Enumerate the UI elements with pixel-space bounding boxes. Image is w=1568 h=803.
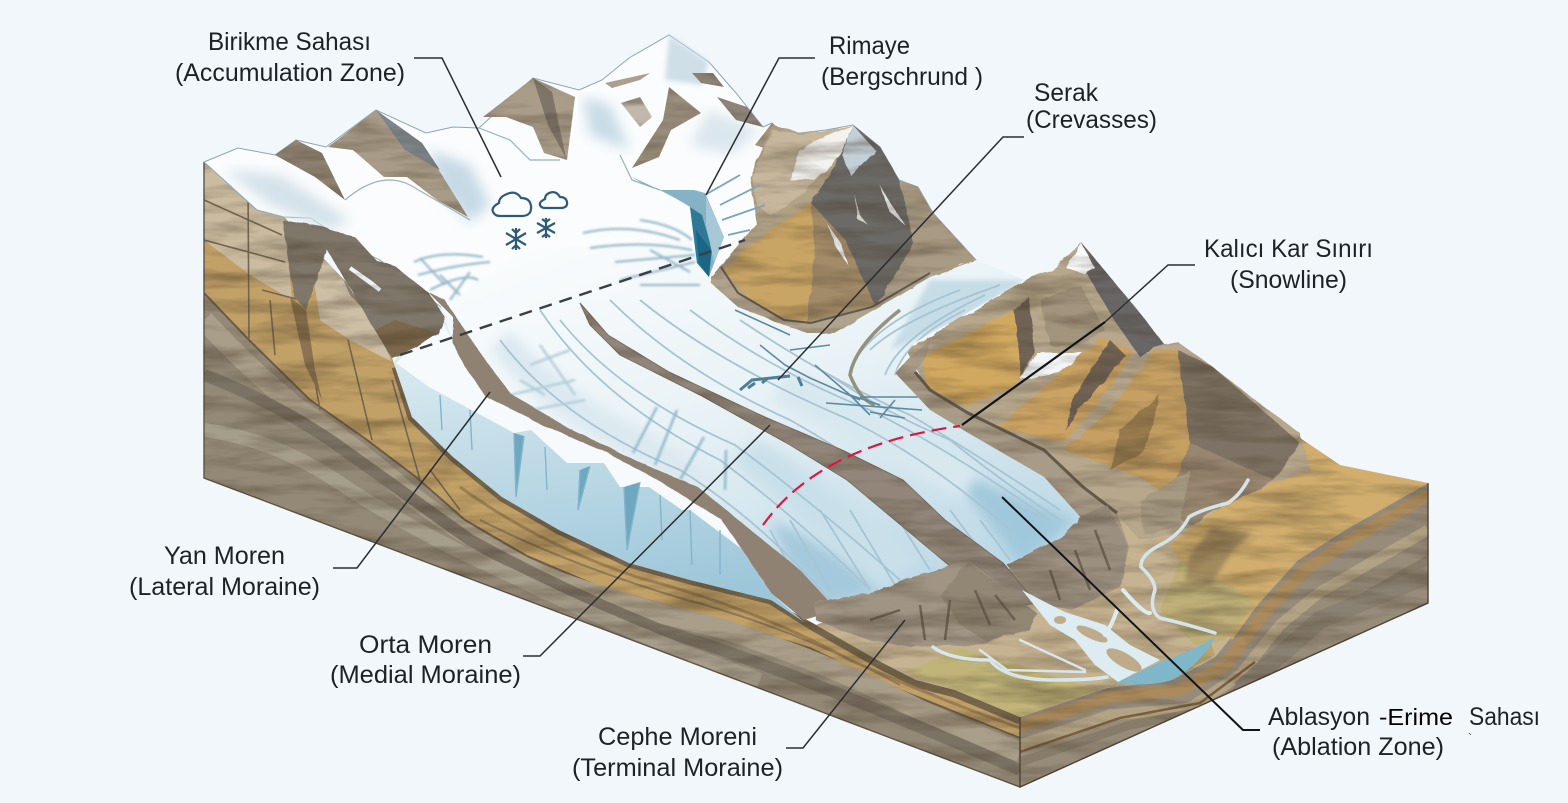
label: medial moraine: (Medial Moraine) xyxy=(330,661,521,689)
terrain: right valley and foreground ground xyxy=(816,430,1428,717)
snowline red dashed xyxy=(763,426,960,525)
label: ablation zone: -Erime xyxy=(1379,704,1453,730)
label: medial moraine: Orta Moren xyxy=(359,631,492,659)
label: bergschrund: (Bergschrund ) xyxy=(821,63,983,91)
crevasses in upper snowfield xyxy=(414,220,700,300)
right moraine xyxy=(895,340,1129,610)
icon: clouds and snowflakes xyxy=(493,192,567,250)
left lateral moraine xyxy=(429,293,837,620)
glacier ice body xyxy=(441,240,1083,610)
label: bergschrund xyxy=(706,32,983,195)
label: terminal moraine xyxy=(572,620,905,782)
label: accumulation zone: (Accumulation Zone) xyxy=(175,59,405,87)
label: ablation zone: Ablasyon xyxy=(1268,703,1370,731)
label: ablation zone: Sahası xyxy=(1469,703,1540,731)
label: terminal moraine: (Terminal Moraine) xyxy=(572,754,783,782)
label: lateral moraine: (Lateral Moraine) xyxy=(129,573,320,601)
snowline dashed boundary xyxy=(400,240,745,355)
label: ablation zone: (Ablation Zone) xyxy=(1272,733,1444,761)
label: accumulation zone: Birikme Sahası xyxy=(208,28,371,56)
label: ablation zone xyxy=(1002,497,1540,761)
right mountain range xyxy=(895,242,1310,610)
label: crevasses xyxy=(778,79,1157,380)
label: lateral moraine: Yan Moren xyxy=(164,542,285,570)
bergschrund xyxy=(632,175,765,277)
medial moraine xyxy=(580,303,1037,610)
label: terminal moraine: Cephe Moreni xyxy=(598,723,757,751)
label: crevasses: Serak xyxy=(1034,79,1098,107)
back peaks and accumulation snowfield xyxy=(204,35,976,420)
label: lateral moraine xyxy=(129,392,490,601)
block: front-left strata face xyxy=(204,162,1020,787)
label: crevasses: (Crevasses) xyxy=(1026,106,1157,134)
rivers and lake xyxy=(933,480,1248,684)
label: bergschrund: Rimaye xyxy=(829,32,910,60)
left rock spur xyxy=(282,220,445,400)
terminal moraine xyxy=(815,505,1129,647)
label: medial moraine xyxy=(330,425,770,689)
ice cliff wall xyxy=(394,307,804,622)
label: accumulation zone xyxy=(175,28,501,177)
label: snowline xyxy=(962,235,1373,425)
label: ablation zone: ` xyxy=(1468,731,1472,745)
serac marks xyxy=(740,376,802,390)
block: right strata face xyxy=(1020,483,1428,787)
label: snowline: (Snowline) xyxy=(1230,266,1347,294)
big right mountain xyxy=(711,125,976,333)
label: snowline: Kalıcı Kar Sınırı xyxy=(1204,235,1373,263)
